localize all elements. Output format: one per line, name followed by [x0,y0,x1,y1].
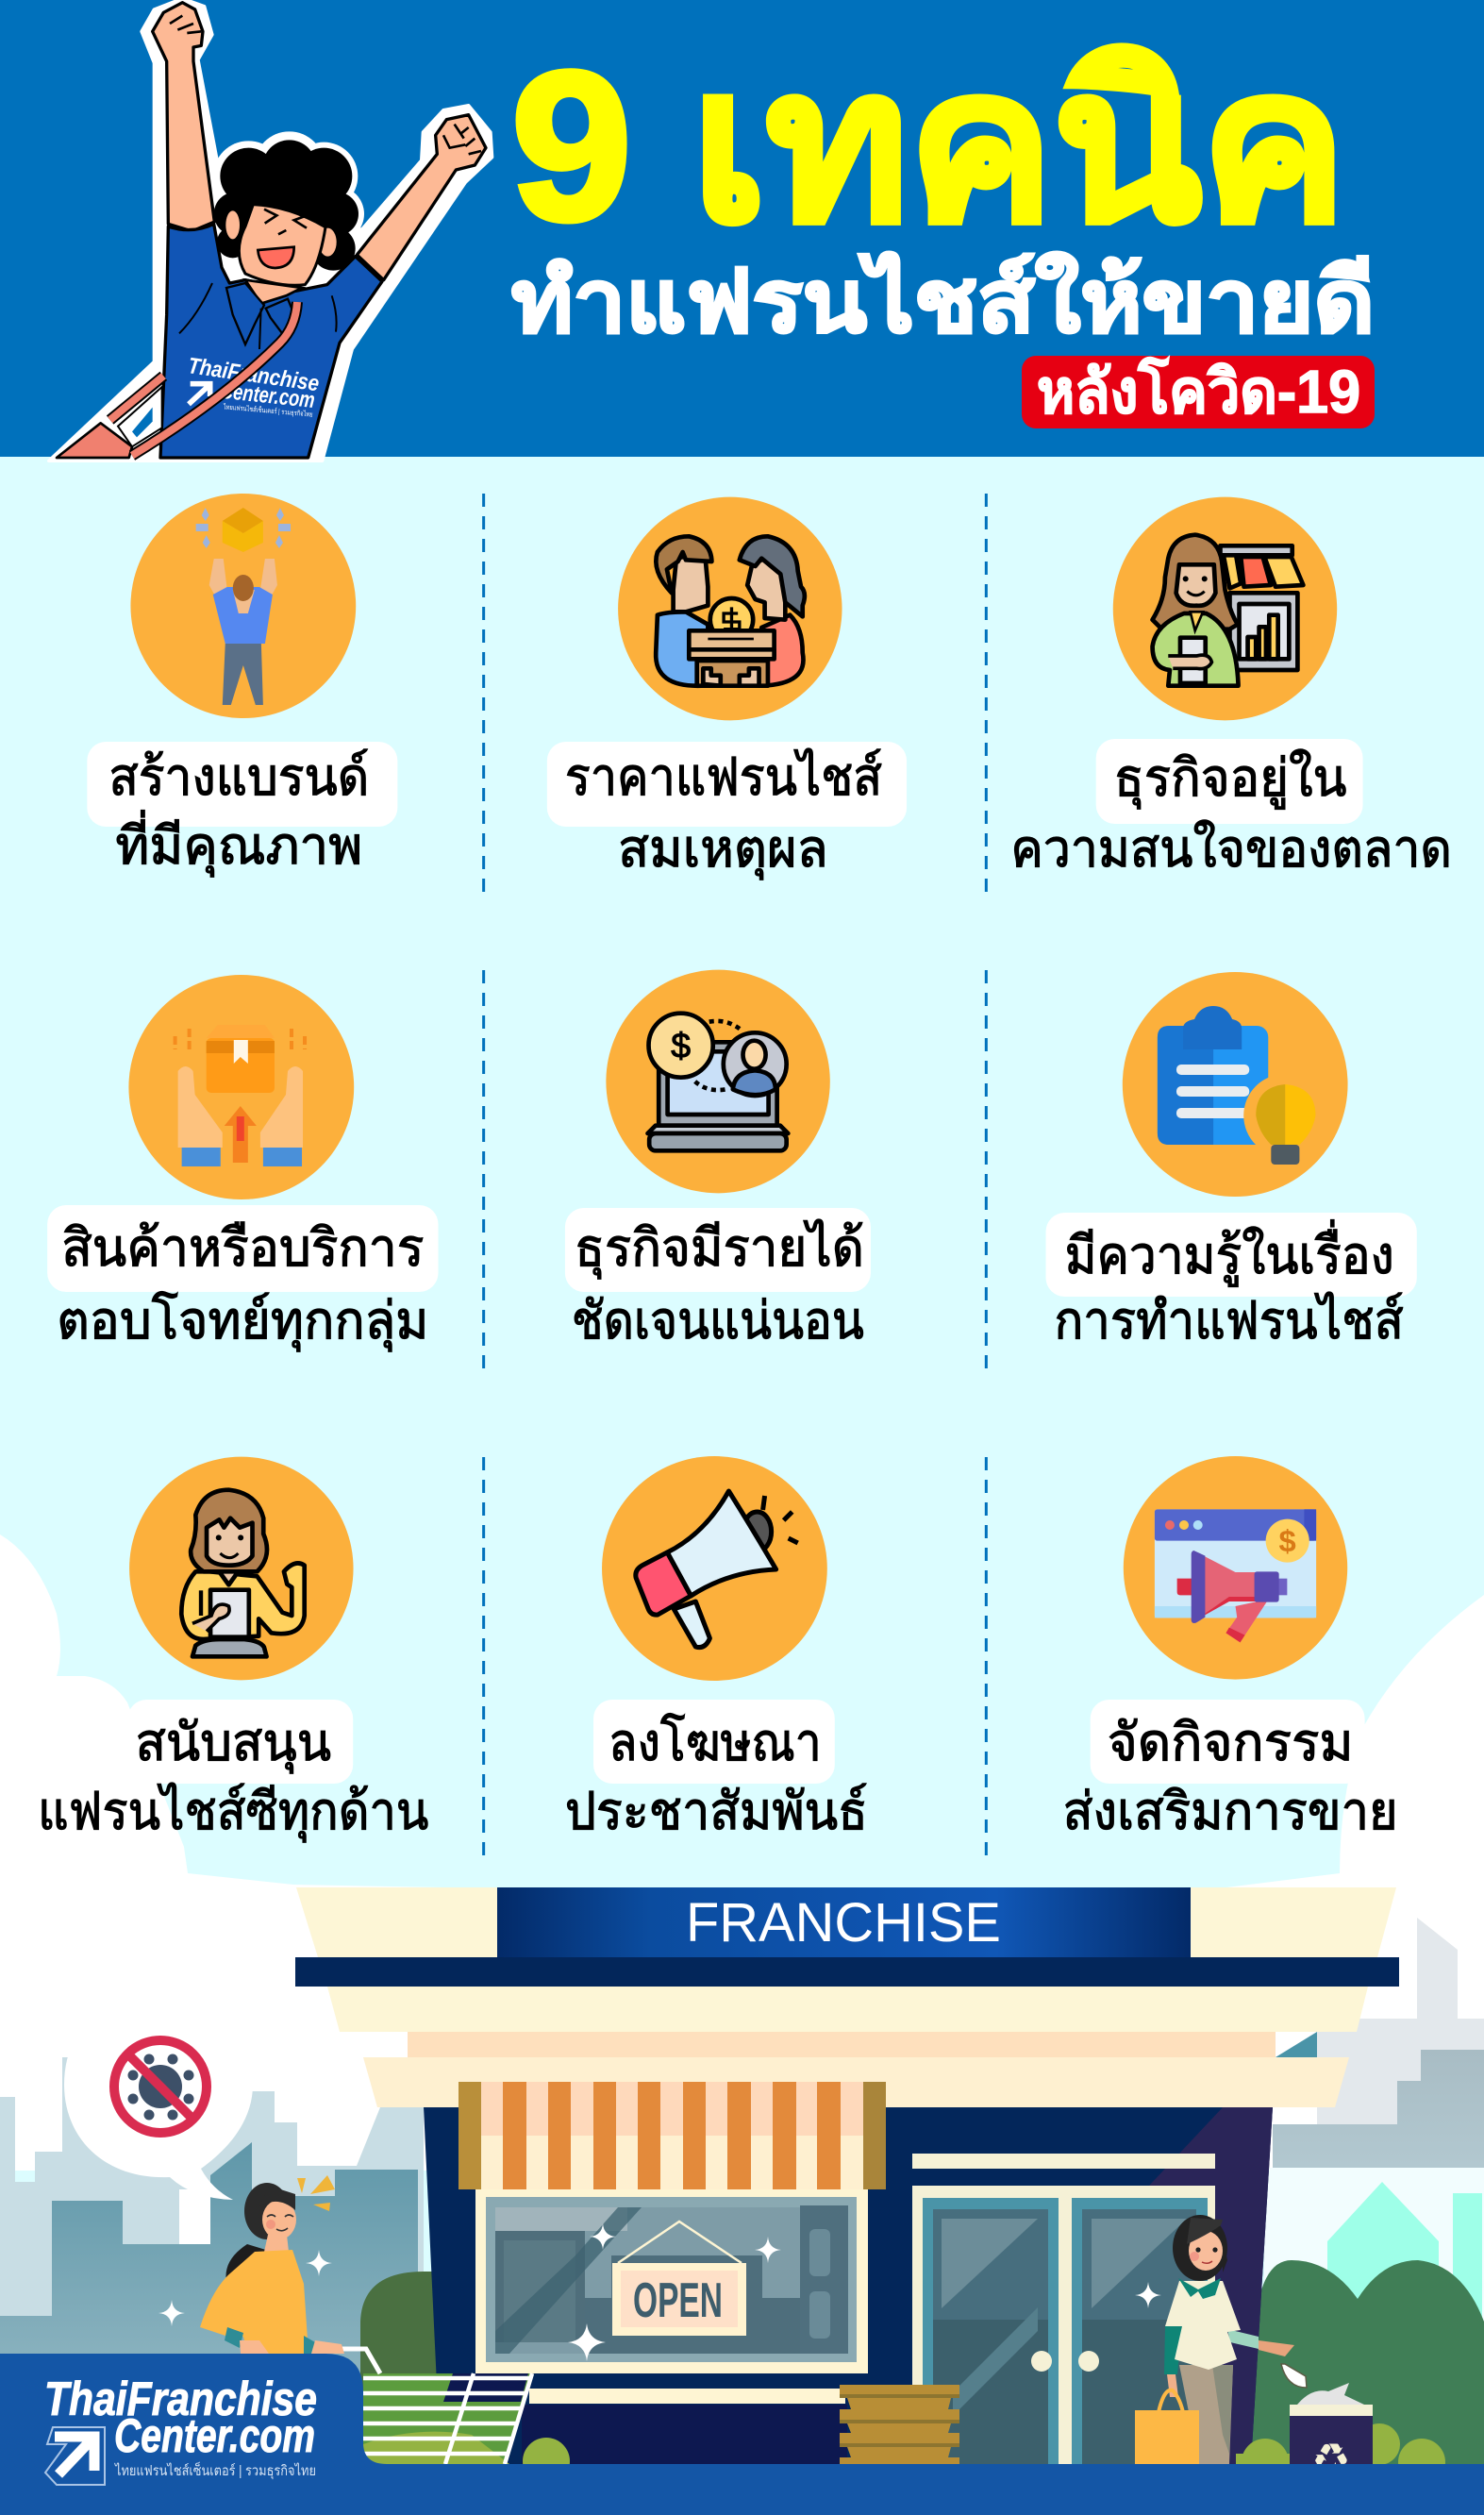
label: ธุรกิจมีรายได้ [575,1218,864,1280]
label [1010,739,1452,878]
label: ราคาแฟรนไชส์ [565,747,882,806]
icon: couple with coin box [618,497,842,720]
icon: laptop with coin and user [606,970,830,1193]
dashed dividers [484,494,986,1857]
label: ความสนใจของตลาด [1010,819,1452,878]
footer band and logo panel [0,2354,1484,2515]
subtitle: ทำแฟรนไชส์ให้ขายดี [511,252,1375,350]
hero character [49,0,492,461]
label [47,1205,438,1352]
label: ลงโฆษณา [609,1713,822,1771]
item 7: support franchisee [38,1457,428,1843]
store building [295,1887,1399,2464]
label: มีความรู้ในเรื่อง [1065,1219,1394,1287]
label [1046,1213,1417,1350]
label: สร้างแบรนด์ [108,747,369,806]
icon: hands with box [128,975,354,1199]
label: ที่มีคุณภาพ [115,810,362,878]
item 2: reasonable price [547,497,907,880]
label: สนับสนุน [135,1713,331,1774]
label [38,1700,428,1843]
icon: woman with clipboard [129,1457,354,1680]
recycling bin [1236,2383,1445,2486]
icon: megaphone [602,1456,827,1681]
hero character: ไทยแฟรนไชส์เซ็นเตอร์ | รวมธุรกิจไทย [223,401,313,419]
recycling bin: ♻ [1311,2434,1351,2485]
item 3: market interest [1010,497,1452,878]
label: ตอบโจทย์ทุกกลุ่ม [57,1291,428,1352]
hero character: ThaiFranchise [186,353,321,396]
icon: person lifting gem [130,494,356,718]
sign: FRANCHISE: FRANCHISE [686,1892,1001,1953]
label: ชัดเจนแน่นอน [572,1291,864,1350]
awning [459,2082,886,2189]
icon: shop owner with chart [1113,497,1337,720]
label [565,1208,871,1350]
label [1063,1700,1398,1840]
right city skyline [1264,1918,1484,2470]
open sign: OPEN [633,2273,723,2328]
stacked baskets [840,2385,959,2464]
label [565,1700,868,1840]
icon: clipboard and bulb [1123,972,1348,1197]
bushes behind store [360,2260,1484,2464]
item 4: products for every group [47,975,438,1352]
label: ธุรกิจอยู่ใน [1114,748,1347,810]
item 9: promotions [1063,1456,1398,1840]
label: ส่งเสริมการขาย [1063,1782,1398,1840]
shopper woman with yellow sweater [200,2175,344,2354]
open sign [612,2222,746,2336]
label: สินค้าหรือบริการ [61,1218,424,1277]
woman with bag throwing mask [1135,2215,1307,2464]
item 8: advertising [565,1456,868,1840]
label: การทำแฟรนไชส์ [1055,1291,1404,1350]
window [475,2188,868,2373]
logo wordmark: ThaiFranchise [44,2372,317,2425]
logo wordmark: ไทยแฟรนไชส์เซ็นเตอร์ | รวมธุรกิจไทย [114,2461,316,2480]
background clouds [0,1534,1484,2171]
nine technique grid [38,494,1452,1857]
icon: laptop with coin and user: $ [671,1025,691,1065]
sign: FRANCHISE [497,1887,1191,1957]
logo arrow [45,2427,105,2485]
speech bubble with no-virus icon [64,1992,253,2200]
badge: post covid: หลังโควิด-19 [1037,356,1360,426]
front shrubs and cart [259,2349,570,2485]
header band [0,0,1484,457]
label: จัดกิจกรรม [1108,1713,1354,1771]
label: สมเหตุผล [618,819,828,880]
left city skyline [0,2057,424,2464]
doors [912,2154,1215,2464]
logo wordmark: Center.com [114,2409,315,2462]
item 1: quality brand [87,494,397,878]
hero character: Center.com [220,378,316,413]
icon: web megaphone [1124,1456,1347,1680]
icon: web megaphone: $ [1279,1523,1296,1558]
sparkles [158,2223,1161,2361]
label: แฟรนไชส์ซีทุกด้าน [38,1782,428,1843]
title: 9 เทคนิค: 9 เทคนิค [511,27,1346,263]
label [547,742,907,880]
label [87,742,397,878]
item 5: clear income [565,970,871,1350]
parapet [296,1887,1396,1957]
item 6: franchise knowledge [1046,972,1417,1350]
logo wordmark [44,2372,317,2480]
label: ประชาสัมพันธ์ [565,1782,868,1840]
